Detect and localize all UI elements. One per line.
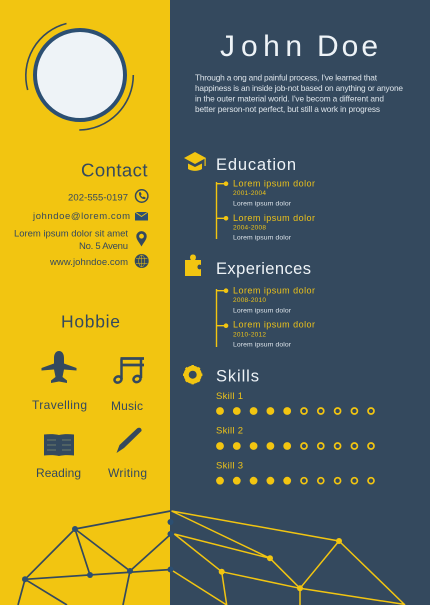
timeline: education: Lorem ipsum dolor bbox=[233, 235, 292, 242]
heading: experiences: Experiences bbox=[216, 260, 311, 278]
heading: skills: Skills bbox=[216, 368, 259, 386]
profile photo circle bbox=[26, 24, 133, 130]
skill 3 rating: Skill 3 bbox=[216, 460, 243, 471]
skill 1 rating bbox=[216, 391, 374, 415]
icon: graduation cap bbox=[184, 152, 206, 171]
timeline: experiences: Lorem ipsum dolor bbox=[233, 307, 292, 314]
heading: contact: Contact bbox=[81, 160, 148, 181]
skill 1 rating: Skill 1 bbox=[216, 391, 243, 402]
icon: location pin bbox=[136, 231, 147, 246]
label: travelling: Travelling bbox=[32, 398, 87, 412]
polygon network: yellow lines on dark bbox=[172, 511, 405, 605]
timeline: education bbox=[216, 179, 315, 242]
timeline: education: Lorem ipsum dolor bbox=[233, 213, 315, 223]
label: reading: Reading bbox=[36, 466, 81, 480]
contact details bbox=[14, 192, 130, 268]
timeline: education: Lorem ipsum dolor bbox=[233, 200, 292, 207]
contact details: johndoe@lorem.com bbox=[32, 211, 130, 222]
icon: music notes bbox=[113, 358, 144, 384]
skill 2 rating bbox=[216, 426, 374, 450]
icon: mail bbox=[135, 212, 148, 220]
panel: yellow sidebar bbox=[0, 0, 170, 605]
text block: introduction: better person-not perfect, but still a work in progress bbox=[195, 104, 380, 114]
icon: gear bbox=[183, 365, 202, 384]
icon: puzzle piece bbox=[185, 254, 201, 276]
timeline: experiences: Lorem ipsum dolor bbox=[233, 286, 315, 296]
text block: introduction: happiness is an inside job-not based on anything or anyone bbox=[195, 83, 403, 93]
text block: introduction bbox=[195, 72, 403, 114]
timeline: education: 2001-2004 bbox=[233, 190, 266, 197]
contact details: No. 5 Avenu bbox=[79, 241, 128, 252]
text block: introduction: in the outer material world. I've becom a different and bbox=[195, 94, 384, 104]
title: name: Doe bbox=[317, 30, 378, 63]
skill 2 rating: Skill 2 bbox=[216, 426, 243, 437]
contact details: Lorem ipsum dolor sit amet bbox=[14, 229, 128, 240]
icon: phone bbox=[136, 190, 148, 202]
timeline: experiences: Lorem ipsum dolor bbox=[233, 342, 292, 349]
text block: introduction: Through a ong and painful process, I've learned that bbox=[195, 72, 378, 82]
title: name bbox=[220, 30, 378, 63]
icon: globe bbox=[135, 254, 148, 268]
timeline: experiences bbox=[216, 286, 315, 349]
timeline: experiences: Lorem ipsum dolor bbox=[233, 320, 315, 330]
timeline: education: Lorem ipsum dolor bbox=[233, 179, 315, 189]
heading: education: Education bbox=[216, 156, 296, 174]
icon: pen bbox=[116, 428, 142, 453]
timeline: experiences: 2008-2010 bbox=[233, 297, 266, 304]
icon: airplane bbox=[42, 351, 76, 383]
heading: hobbie: Hobbie bbox=[61, 312, 120, 332]
contact details: 202-555-0197 bbox=[68, 192, 128, 204]
timeline: education: 2004-2008 bbox=[233, 224, 266, 231]
timeline: experiences: 2010-2012 bbox=[233, 331, 266, 338]
skill 3 rating bbox=[216, 460, 374, 485]
panel: dark main area bbox=[170, 0, 430, 605]
contact details: www.johndoe.com bbox=[49, 257, 128, 268]
label: writing: Writing bbox=[108, 466, 147, 480]
polygon network: dark lines on yellow bbox=[18, 511, 174, 605]
title: name: J bbox=[220, 30, 235, 63]
label: music: Music bbox=[111, 399, 143, 413]
icon: open book bbox=[44, 434, 74, 456]
title: name: ohn bbox=[241, 30, 302, 63]
